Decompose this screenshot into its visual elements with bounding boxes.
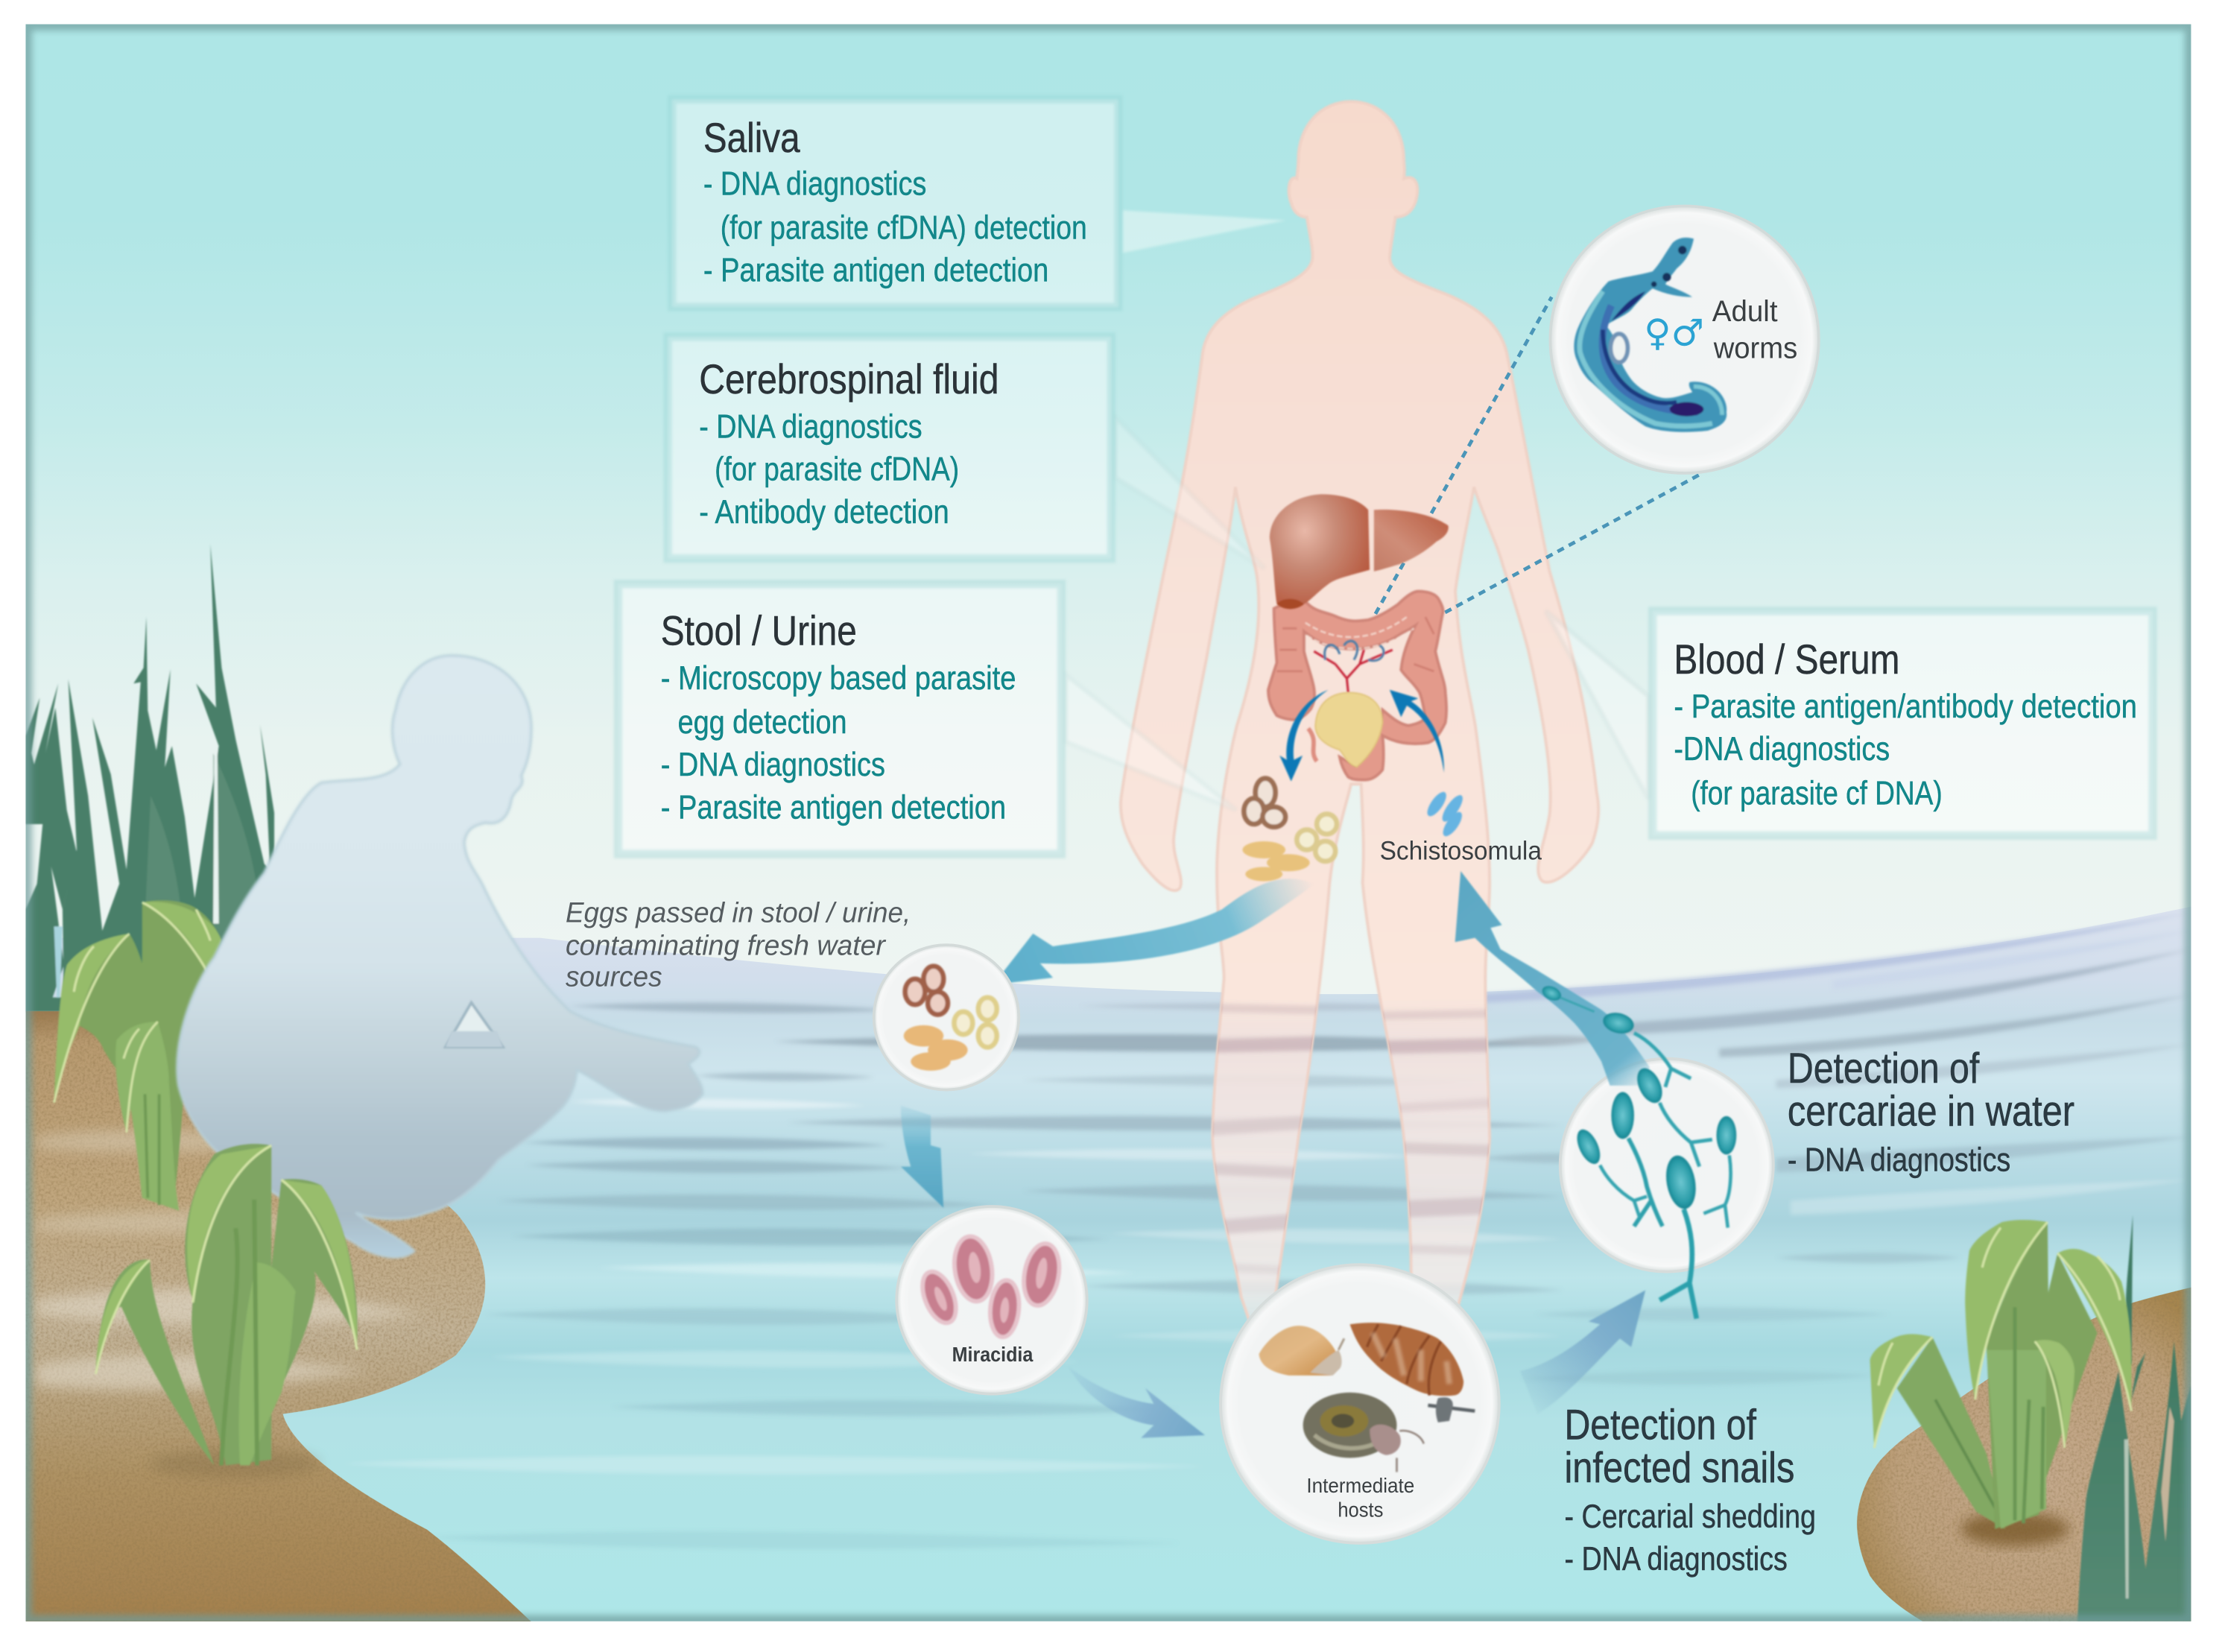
heading: saliva: Saliva xyxy=(703,115,800,161)
text block: eggs passed note: contaminating fresh water xyxy=(566,929,886,961)
left leaf xyxy=(1870,1334,2005,1529)
small leaf xyxy=(221,1200,296,1466)
leg water ripples xyxy=(1194,1003,1506,1276)
cercaria 4 xyxy=(1572,1126,1647,1218)
saliva methods: - Parasite antigen detection xyxy=(703,252,1048,289)
text block: snail detection: infected snails xyxy=(1564,1444,1794,1492)
circle: cercariae xyxy=(1560,1059,1773,1272)
heading: stool and urine: Stool / Urine xyxy=(661,608,857,654)
right leaf xyxy=(2035,1249,2131,1478)
schistosomula organisms xyxy=(1424,789,1466,839)
small leaf xyxy=(115,1022,179,1211)
callout pointers xyxy=(1066,210,1648,810)
cercaria 1 xyxy=(1611,1092,1662,1227)
sex symbols: ♀♂ xyxy=(1644,311,1704,354)
rear upright leaf xyxy=(185,1144,271,1466)
blood and serum methods: (for parasite cf DNA) xyxy=(1691,774,1943,811)
worm pair xyxy=(1574,238,1727,432)
text block: eggs passed note: sources xyxy=(566,960,662,993)
body eggs cluster xyxy=(1243,779,1337,882)
arrow: eggs to water xyxy=(993,879,1314,984)
arrow: snails to cercariae xyxy=(1520,1290,1645,1414)
eggs: yellow xyxy=(954,998,997,1047)
label: adult worms: worms xyxy=(1713,332,1797,365)
panel: blood and serum xyxy=(1653,611,2153,835)
circle: intermediate hosts xyxy=(1221,1265,1499,1543)
person silhouette xyxy=(177,656,703,1257)
saliva methods: - DNA diagnostics xyxy=(703,165,926,202)
cercariae organisms xyxy=(1540,984,1736,1319)
eggs: brown xyxy=(905,966,948,1015)
right leaf xyxy=(250,1179,358,1457)
organ: liver xyxy=(1270,494,1449,609)
yellow eggs xyxy=(1297,814,1337,861)
text block: cercariae detection: Detection of xyxy=(1788,1045,1979,1092)
circle: eggs xyxy=(874,945,1019,1090)
cercaria 5 xyxy=(1632,1064,1712,1167)
text block: snail detection: Detection of xyxy=(1564,1402,1756,1449)
miracidia organisms xyxy=(916,1234,1064,1338)
label: adult worms xyxy=(1712,295,1797,365)
water ripples xyxy=(341,912,2191,1549)
snail: brown spired xyxy=(1350,1323,1475,1422)
small leaf xyxy=(2035,1340,2074,1448)
snail: orange xyxy=(1259,1326,1344,1376)
text block: cercariae detection xyxy=(1788,1045,2074,1178)
panel: cerebrospinal fluid xyxy=(668,337,1111,558)
shore sand highlights xyxy=(36,1130,426,1478)
sky gradient xyxy=(25,24,2191,994)
text block: snail detection xyxy=(1564,1402,1816,1577)
cercaria 6 xyxy=(1601,1010,1691,1087)
plant: right xyxy=(1870,1220,2131,1529)
label: schistosomula: Schistosomula xyxy=(1380,837,1542,866)
arrow: eggs released xyxy=(1279,690,1329,781)
left leaf xyxy=(54,934,156,1103)
brown eggs xyxy=(1244,779,1285,827)
cerebrospinal fluid methods xyxy=(699,408,959,531)
rear leaf xyxy=(139,900,221,1208)
right bank plant shadow xyxy=(1961,1512,2069,1546)
text block: eggs passed note: Eggs passed in stool / urine, xyxy=(566,897,911,929)
saliva methods xyxy=(703,165,1087,289)
cerebrospinal fluid methods: (for parasite cfDNA) xyxy=(715,451,959,488)
organ: mesenteric vessels xyxy=(1314,641,1393,693)
text block: snail detection: - DNA diagnostics xyxy=(1564,1540,1788,1577)
stool and urine methods: - DNA diagnostics xyxy=(661,746,885,783)
heading: cerebrospinal fluid: Cerebrospinal fluid xyxy=(699,356,999,402)
label: intermediate hosts: Intermediate xyxy=(1306,1474,1414,1497)
arrow: cercariae to schistosomula xyxy=(1455,871,1650,1086)
plant: rear left xyxy=(54,900,221,1211)
blood and serum methods xyxy=(1674,688,2137,811)
cercaria 7 xyxy=(1540,984,1595,1012)
stool and urine methods: - Parasite antigen detection xyxy=(661,788,1006,826)
right shore bank xyxy=(1857,1288,2191,1621)
human body figure xyxy=(1121,101,1598,1343)
stool and urine methods xyxy=(661,659,1016,826)
snail: grey coiled xyxy=(1303,1393,1424,1472)
text block: cercariae detection: - DNA diagnostics xyxy=(1788,1141,2010,1178)
cerebrospinal fluid methods: - DNA diagnostics xyxy=(699,408,922,445)
left shore bank xyxy=(26,1011,540,1630)
reeds: right foreground xyxy=(2077,1215,2191,1621)
stool and urine methods: egg detection xyxy=(678,703,847,741)
label: miracidia: Miracidia xyxy=(952,1343,1034,1366)
saliva methods: (for parasite cfDNA) detection xyxy=(721,209,1087,246)
blood and serum methods: -DNA diagnostics xyxy=(1674,730,1890,768)
heading: blood and serum: Blood / Serum xyxy=(1674,636,1900,683)
dashed zoom lines to adult worms xyxy=(1376,297,1702,614)
label: intermediate hosts xyxy=(1306,1474,1414,1522)
cercaria 3 xyxy=(1703,1116,1736,1228)
eggs: orange xyxy=(904,1025,968,1071)
text block: snail detection: - Cercarial shedding xyxy=(1564,1498,1816,1535)
left leaf xyxy=(95,1259,215,1466)
text block: eggs passed note xyxy=(566,897,911,993)
reeds: left background xyxy=(25,544,277,1012)
organ: colon xyxy=(1268,592,1446,780)
panel: saliva xyxy=(672,100,1118,307)
organ: bladder xyxy=(1315,693,1382,767)
circle: miracidia xyxy=(896,1206,1087,1394)
label: intermediate hosts: hosts xyxy=(1338,1498,1383,1522)
panel: stool and urine xyxy=(618,584,1061,854)
label: adult worms: Adult xyxy=(1712,295,1778,328)
orange eggs xyxy=(1243,841,1310,882)
cerebrospinal fluid methods: - Antibody detection xyxy=(699,493,949,531)
stool and urine methods: - Microscopy based parasite xyxy=(661,659,1016,697)
plant: front left xyxy=(95,1144,358,1466)
arrow: schistosomula to veins xyxy=(1390,690,1444,773)
circle: adult worms xyxy=(1550,206,1819,473)
blood and serum methods: - Parasite antigen/antibody detection xyxy=(1674,688,2137,725)
text block: cercariae detection: cercariae in water xyxy=(1788,1087,2074,1135)
arrow: miracidia to snails xyxy=(1069,1367,1205,1438)
fresh water body xyxy=(25,907,2191,1621)
arrow: eggs to miracidia xyxy=(901,1106,943,1208)
main leaf xyxy=(1965,1220,2049,1529)
cercaria 2 xyxy=(1659,1153,1700,1319)
